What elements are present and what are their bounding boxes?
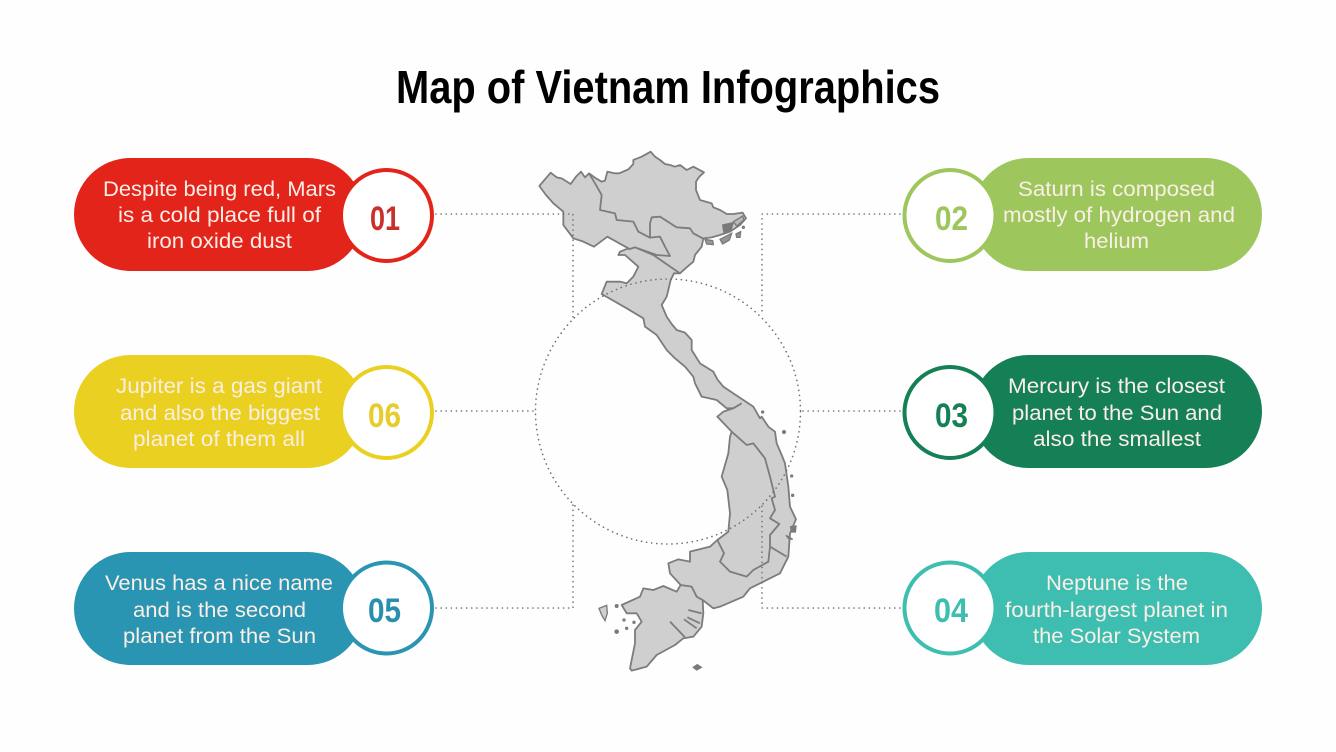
text 03: planet to the Sun and	[1012, 401, 1222, 425]
text 04: Neptune is the	[1046, 571, 1188, 595]
pill: light green	[972, 158, 1262, 271]
text 04: fourth-largest planet in	[1005, 598, 1228, 622]
badge 06	[341, 367, 432, 458]
pill: teal	[972, 552, 1262, 665]
text 05: planet from the Sun	[123, 624, 316, 648]
text 01: is a cold place full of	[118, 203, 321, 227]
text 04: the Solar System	[1033, 624, 1200, 648]
dotted connectors and circle	[436, 214, 900, 608]
panel 06	[74, 355, 432, 468]
panel 03	[904, 355, 1262, 468]
text 05: Venus has a nice name	[105, 571, 333, 595]
panel 05	[74, 552, 432, 665]
text 02: helium	[1084, 229, 1149, 253]
text 06: and also the biggest	[120, 401, 320, 425]
text 02: mostly of hydrogen and	[1003, 203, 1235, 227]
text 03: Mercury is the closest	[1008, 374, 1225, 398]
title: Map of Vietnam Infographics	[396, 61, 940, 113]
badge 01	[341, 170, 432, 261]
text 02: Saturn is composed	[1018, 177, 1215, 201]
badge 03	[904, 367, 996, 458]
badge 02	[904, 170, 996, 261]
panel 01	[74, 158, 432, 271]
badge 01: 01	[370, 200, 400, 238]
text 05	[105, 571, 333, 648]
badge 04	[904, 562, 996, 654]
badge 06: 06	[368, 397, 401, 435]
text 03: also the smallest	[1033, 427, 1201, 451]
badge 05	[341, 562, 432, 654]
text 04	[1005, 571, 1228, 648]
text 05: and is the second	[133, 598, 306, 622]
badge 03: 03	[935, 397, 968, 435]
panel 04	[904, 552, 1262, 665]
text 03	[1008, 374, 1225, 451]
pill: blue	[74, 552, 364, 665]
badge 05: 05	[368, 592, 401, 630]
text 06: planet of them all	[133, 427, 305, 451]
text 01	[103, 177, 336, 253]
pill: dark green	[972, 355, 1262, 468]
panel 02	[904, 158, 1262, 271]
pill: red	[74, 158, 364, 271]
text 01: Despite being red, Mars	[103, 177, 336, 201]
badge 02: 02	[935, 200, 968, 238]
text 06: Jupiter is a gas giant	[116, 374, 322, 398]
badge 04: 04	[934, 592, 968, 630]
text 01: iron oxide dust	[147, 229, 292, 253]
pill: yellow	[74, 355, 364, 468]
text 02	[1003, 177, 1235, 253]
map of Vietnam	[539, 152, 796, 671]
text 06	[116, 374, 322, 451]
